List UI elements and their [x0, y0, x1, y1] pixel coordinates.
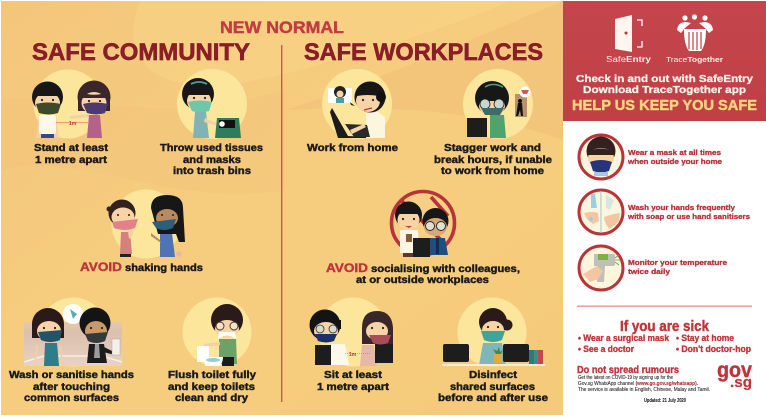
icon: two seated colleagues	[310, 310, 393, 366]
caption	[9, 369, 134, 404]
panel: wash or sanitise hands	[9, 298, 134, 404]
icon: two colleagues, prohibition sign	[392, 192, 454, 257]
icon: two women greeting	[106, 195, 185, 257]
text: temperature	[628, 258, 727, 276]
text: temperature: Monitor your temperature	[628, 258, 727, 267]
caption: and masks	[183, 154, 241, 166]
caption: Flush toilet fully	[168, 369, 256, 381]
caption: Sit at least	[324, 369, 383, 381]
icon: man flushing toilet	[197, 304, 243, 366]
caption: shared surfaces	[450, 381, 535, 393]
panel: disinfect shared surfaces	[438, 298, 548, 404]
caption: clean and dry	[175, 392, 248, 404]
caption: at or outside workplaces	[356, 274, 489, 286]
list: if you are sick	[578, 333, 752, 354]
list: if you are sick: • See a doctor	[578, 344, 635, 354]
caption: Stand at least	[34, 142, 109, 154]
label: tracetogether: Trace Together	[666, 55, 723, 64]
icon: tracetogether people	[677, 14, 713, 51]
caption: Work from home	[307, 142, 398, 154]
text: wear a mask: Wear a mask at all times	[628, 148, 721, 157]
panel: sit 1 metre apart	[310, 298, 393, 393]
caption: into trash bins	[173, 165, 251, 177]
text: wash hands: with soap or use hand sanitisers	[627, 212, 750, 221]
text: wash hands: Wash your hands frequently	[628, 203, 736, 212]
icon: worker with laptop	[328, 82, 386, 138]
list: if you are sick: • Wear a surgical mask	[578, 333, 669, 343]
caption: 1 metre apart	[317, 381, 390, 393]
text: wear a mask	[627, 148, 722, 166]
icon: wash hands	[579, 190, 623, 234]
caption	[438, 369, 548, 404]
title: new normal: NEW NORMAL	[220, 19, 344, 37]
caption: 1 metre apart	[35, 154, 108, 166]
caption	[80, 260, 203, 274]
caption: socialising with colleagues,	[371, 263, 520, 275]
text: wash hands	[627, 203, 750, 221]
text: wear a mask: when outside your home	[627, 157, 722, 166]
heading: safe workplaces: SAFE WORKPLACES	[304, 39, 543, 66]
text: temperature: twice daily	[628, 267, 671, 276]
panel: avoid socialising	[326, 192, 520, 286]
logo: gov.sg	[717, 359, 752, 391]
caption: Wash or sanitise hands	[9, 369, 134, 381]
list: if you are sick: • Stay at home	[676, 333, 734, 343]
heading: safe community: SAFE COMMUNITY	[32, 39, 250, 66]
caption: to work from home	[441, 165, 544, 177]
text: whatsapp channel	[578, 375, 710, 393]
caption: before and after use	[438, 392, 548, 404]
caption: and keep toilets	[168, 381, 255, 393]
list: if you are sick: • Don't doctor-hop	[676, 344, 752, 354]
caption	[434, 142, 552, 177]
text: updated date: Updated: 21 July 2020	[644, 398, 686, 404]
icon: wear a mask	[579, 135, 623, 179]
panel: new normal background	[1, 1, 563, 415]
caption	[34, 142, 109, 166]
icon: woman at laptop with door	[467, 81, 530, 138]
panel: stand 1 metre apart	[32, 70, 110, 166]
column divider	[281, 45, 282, 402]
panel: safeentry and tracetogether	[563, 1, 766, 121]
icon: woman and bin	[182, 78, 241, 138]
label: safeentry: Safe Entry	[606, 55, 652, 64]
caption: after touching	[33, 381, 110, 393]
caption	[168, 369, 256, 404]
caption: common surfaces	[24, 392, 119, 404]
icon: woman cleaning desk	[442, 308, 545, 366]
caption: Disinfect	[469, 369, 518, 381]
icon: elevator scene	[24, 304, 122, 366]
icon: safeentry door	[615, 15, 642, 52]
panel: avoid shaking hands	[80, 190, 203, 274]
distance marker: 1m: 1m	[69, 121, 77, 127]
caption: AVOID	[80, 260, 122, 274]
icon: thermometer	[579, 246, 623, 290]
distance marker: 1m: 1m	[349, 352, 357, 358]
text: check in and out	[576, 73, 753, 96]
text: whatsapp channel: The service is available in English, Chinese, Malay and Tamil.	[578, 387, 710, 393]
panel: throw tissues	[160, 69, 263, 177]
caption: break hours, if unable	[434, 154, 552, 166]
text: whatsapp channel: Get the latest on COVID-19 by signing up for the	[578, 375, 673, 381]
caption: AVOID	[326, 261, 368, 275]
text: check in and out: Check in and out with SafeEntry	[576, 73, 753, 85]
logo: gov.sg: gov	[717, 359, 752, 382]
panel: flush toilet	[168, 298, 256, 404]
heading: do not spread rumours: Do not spread rumours	[577, 364, 679, 376]
logo: gov.sg: .sg	[730, 374, 752, 391]
panel: stagger work	[434, 69, 552, 177]
caption: Throw used tissues	[160, 142, 263, 154]
caption: shaking hands	[125, 262, 203, 274]
panel: work from home	[307, 69, 398, 154]
caption	[160, 142, 263, 177]
icon: man with camouflage mask	[32, 82, 63, 138]
caption	[317, 369, 390, 393]
caption	[326, 261, 520, 286]
text: whatsapp channel: Gov.sg WhatsApp channel (www.go.gov.sg/whatsapp).	[578, 381, 699, 387]
text: check in and out: Download TraceTogether app	[583, 84, 746, 96]
icon: woman with purple mask	[70, 80, 110, 138]
heading: if you are sick: If you are sick	[620, 319, 710, 335]
heading: help us keep you safe: HELP US KEEP YOU SAFE	[572, 98, 757, 114]
caption: Stagger work and	[444, 142, 541, 154]
